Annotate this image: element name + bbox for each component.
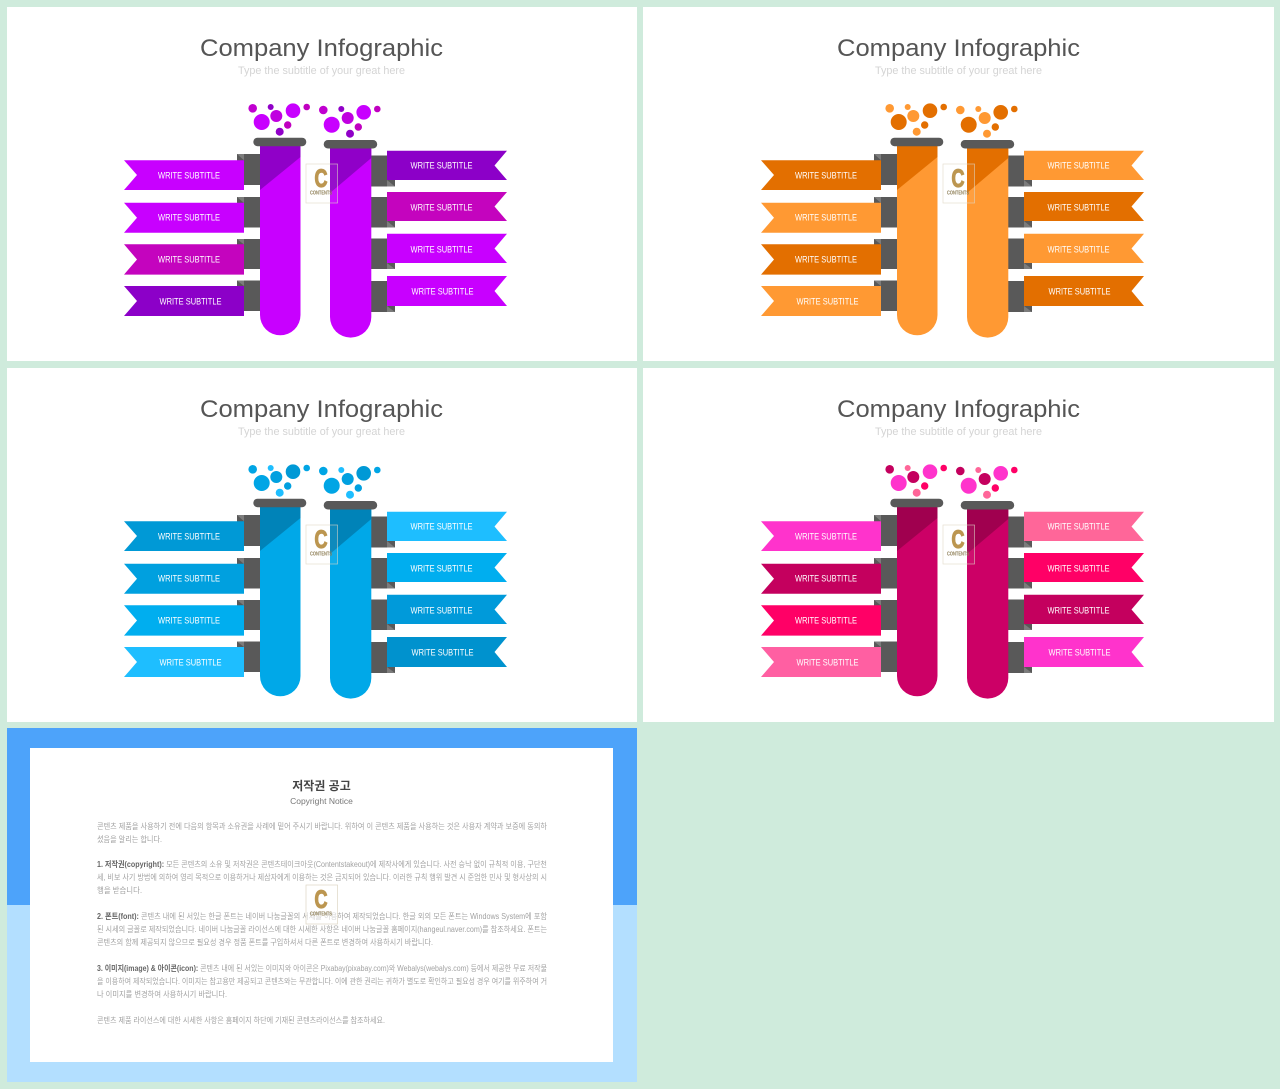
watermark logo <box>306 525 338 564</box>
ribbon: left 3 <box>761 244 881 275</box>
watermark logo <box>943 164 974 203</box>
ribbon: right 2: WRITE SUBTITLE <box>1048 202 1110 212</box>
ribbon: right 1 <box>1024 512 1144 541</box>
section 2: font: 2. 폰트(font): 콘텐츠 내에 된 서있는 한글 폰트는 네이버 나눔글꼴의 서체를 이용하여 제작되었습니다. 한글 외의 모든 폰트는 Windows System에 포함 <box>97 911 548 921</box>
watermark logo: CONTENTS <box>310 190 333 196</box>
gray connector tabs <box>237 515 395 673</box>
subtitle: Type the subtitle of your great here <box>238 65 405 77</box>
ribbon: left 3 <box>124 244 244 275</box>
bubbles: right tube <box>956 466 1018 499</box>
test tube: right <box>324 140 377 338</box>
ribbon: right 4 <box>387 637 507 667</box>
gray connector tabs <box>237 154 395 312</box>
ribbon: left 4: WRITE SUBTITLE <box>160 658 222 668</box>
ribbon: left 3: WRITE SUBTITLE <box>795 254 857 264</box>
ribbon: left 2 <box>124 564 244 594</box>
title: Company Infographic <box>837 35 1080 62</box>
title: Company Infographic <box>837 396 1080 423</box>
ribbon: right 4 <box>1024 637 1144 667</box>
ribbon: left 3: WRITE SUBTITLE <box>158 616 220 626</box>
section 1: copyright: 행을 받습니다. <box>97 885 142 895</box>
watermark logo: CONTENTS <box>947 190 970 196</box>
bubbles: right tube <box>319 466 381 499</box>
ribbon: right 1: WRITE SUBTITLE <box>1048 160 1110 170</box>
gray connector tabs <box>874 154 1032 312</box>
intro text <box>97 821 548 844</box>
section 3: image and icon: 3. 이미지(image) & 아이콘(icon): 콘텐츠 내에 된 서있는 이미지와 아이콘은 Pixabay(pixabay.com)와 Webalys(webalys.com) 등에서 제공한 무료 저작물 <box>97 963 547 973</box>
panel: orange infographic <box>643 7 1274 361</box>
panel: blue infographic <box>7 368 637 722</box>
panel: copyright notice <box>7 728 637 1082</box>
ribbon: left 2 <box>761 203 881 233</box>
ribbon: left 3: WRITE SUBTITLE <box>795 616 857 626</box>
ribbon: left 4 <box>124 647 244 677</box>
copyright subheading: Copyright Notice <box>290 796 353 806</box>
ribbon: left 4 <box>761 647 881 677</box>
test tube: left <box>253 499 306 696</box>
ribbon: right 3: WRITE SUBTITLE <box>410 244 472 254</box>
watermark logo: CONTENTS <box>310 552 333 558</box>
section 1: copyright: 세, 비보 사기 방법에 의하여 영리 목적으로 이용하거나 제삼자에게 이용하는 것은 금지되어 있습니다. 이러한 규칙 행위 발견 시 준엄한 민사 및 형사상의 시 <box>97 872 547 882</box>
section 2: font: 된 시세의 글꼴로 제작되었습니다. 네이버 나눔글꼴 라이선스에 대한 시세한 사항은 네이버 나눔글꼴 홈페이지(hangeul.naver.com)를 참조하세요. 폰트는 <box>97 924 547 934</box>
test tube: right <box>324 501 377 699</box>
ribbon: right 1: WRITE SUBTITLE <box>410 522 472 532</box>
ribbon: right 1 <box>1024 151 1144 180</box>
section 2: font: 콘텐츠의 함께 제공되지 않으므로 필요성 경우 정품 폰트를 구입하셔서 다른 폰트로 변경하여 사용하시기 바랍니다. <box>97 937 433 947</box>
section 1: copyright: 1. 저작권(copyright): 모든 콘텐츠의 소유 및 저작권은 콘텐츠테이크아웃(Contentstakeout)에 제작사에게 있습니다. 사전 승낙 없이 규칙적 이용, 구단천 <box>97 859 547 869</box>
ribbon: left 1: WRITE SUBTITLE <box>795 532 857 542</box>
watermark logo <box>943 525 974 564</box>
ribbon: left 1 <box>761 160 881 190</box>
bubbles: left tube <box>248 103 310 136</box>
ribbon: left 1 <box>761 521 881 551</box>
ribbon: left 2: WRITE SUBTITLE <box>158 212 220 222</box>
subtitle: Type the subtitle of your great here <box>875 426 1042 438</box>
ribbon: left 4: WRITE SUBTITLE <box>160 296 222 306</box>
ribbon: right 2: WRITE SUBTITLE <box>1048 564 1110 574</box>
ribbon: right 3: WRITE SUBTITLE <box>1048 606 1110 616</box>
ribbon: left 3 <box>761 605 881 636</box>
ribbon: right 2 <box>387 192 507 221</box>
watermark logo <box>306 885 338 924</box>
ribbon: left 4: WRITE SUBTITLE <box>796 658 858 668</box>
bubbles: left tube <box>885 103 947 136</box>
subtitle: Type the subtitle of your great here <box>238 426 405 438</box>
ribbon: left 2: WRITE SUBTITLE <box>795 574 857 584</box>
ribbon: right 1: WRITE SUBTITLE <box>410 160 472 170</box>
ribbon: left 2: WRITE SUBTITLE <box>795 212 857 222</box>
watermark logo: C <box>314 886 328 914</box>
bubbles: right tube <box>956 105 1018 138</box>
test tube: left <box>890 138 943 335</box>
watermark logo: C <box>314 165 328 193</box>
ribbon: right 2 <box>1024 553 1144 582</box>
test tube: left <box>890 499 943 696</box>
ribbon: right 1 <box>387 512 507 541</box>
closing text: 콘텐츠 제품 라이선스에 대한 시세한 사항은 홈페이지 하단에 기재된 콘텐츠라이선스를 참조하세요. <box>97 1015 385 1025</box>
ribbon: right 3 <box>387 595 507 624</box>
ribbon: right 1 <box>387 151 507 180</box>
ribbon: left 4 <box>124 286 244 316</box>
subtitle: Type the subtitle of your great here <box>875 65 1042 77</box>
test tube: left <box>253 138 306 335</box>
ribbon: right 3: WRITE SUBTITLE <box>410 606 472 616</box>
ribbon: right 4 <box>387 276 507 306</box>
ribbon: left 1 <box>124 160 244 190</box>
title: Company Infographic <box>200 396 443 423</box>
ribbon: right 4: WRITE SUBTITLE <box>1048 648 1110 658</box>
ribbon: left 2 <box>761 564 881 594</box>
ribbon: left 4 <box>761 286 881 316</box>
bubbles: right tube <box>319 105 381 138</box>
section 3: image and icon: 나 이미지를 변경하여 사용하시기 바랍니다. <box>97 989 227 999</box>
ribbon: right 3: WRITE SUBTITLE <box>1048 244 1110 254</box>
section 3: image and icon: 을 이용하여 제작되었습니다. 이미지는 참고용만 제공되고 콘텐츠와는 무관합니다. 이에 관한 권리는 귀하가 별도로 확인하고 필요성 경우 여기를 위주하여 거 <box>97 976 547 986</box>
intro text: 셨음을 알리는 합니다. <box>97 834 162 844</box>
ribbon: left 2: WRITE SUBTITLE <box>158 574 220 584</box>
ribbon: left 1: WRITE SUBTITLE <box>158 532 220 542</box>
ribbon: right 3 <box>1024 234 1144 263</box>
test tube: right <box>961 501 1014 699</box>
ribbon: right 4 <box>1024 276 1144 306</box>
ribbon: right 2: WRITE SUBTITLE <box>410 564 472 574</box>
watermark logo: CONTENTS <box>947 552 970 558</box>
panel: purple infographic <box>7 7 637 361</box>
ribbon: left 4: WRITE SUBTITLE <box>796 296 858 306</box>
ribbon: left 1 <box>124 521 244 551</box>
ribbon: left 2 <box>124 203 244 233</box>
watermark logo: C <box>952 526 964 554</box>
ribbon: right 3 <box>1024 595 1144 624</box>
ribbon: left 3: WRITE SUBTITLE <box>158 254 220 264</box>
panel: pink infographic <box>643 368 1274 722</box>
watermark logo <box>306 164 338 203</box>
ribbon: left 3 <box>124 605 244 636</box>
gray connector tabs <box>874 515 1032 673</box>
watermark logo: C <box>952 165 964 193</box>
section 2: font <box>97 911 548 947</box>
title: Company Infographic <box>200 35 443 62</box>
watermark logo: C <box>314 526 328 554</box>
bubbles: left tube <box>885 464 947 497</box>
ribbon: right 1: WRITE SUBTITLE <box>1048 522 1110 532</box>
section 1: copyright <box>97 859 547 895</box>
watermark logo: CONTENTS <box>310 912 333 918</box>
ribbon: right 4: WRITE SUBTITLE <box>412 648 474 658</box>
ribbon: right 4: WRITE SUBTITLE <box>1048 286 1110 296</box>
intro text: 콘텐츠 제품을 사용하기 전에 다음의 항목과 소유권을 사례에 밑어 주시기 바랍니다. 위하여 이 콘텐츠 제품을 사용하는 것은 사용자 계약과 보증에 동의하 <box>97 821 548 831</box>
copyright heading: 저작권 공고 <box>292 778 351 793</box>
bubbles: left tube <box>248 464 310 497</box>
test tube: right <box>961 140 1014 338</box>
ribbon: right 2: WRITE SUBTITLE <box>410 202 472 212</box>
ribbon: right 3 <box>387 234 507 263</box>
section 3: image and icon <box>97 963 547 999</box>
ribbon: right 4: WRITE SUBTITLE <box>412 286 474 296</box>
ribbon: left 1: WRITE SUBTITLE <box>158 170 220 180</box>
ribbon: left 1: WRITE SUBTITLE <box>795 170 857 180</box>
ribbon: right 2 <box>1024 192 1144 221</box>
ribbon: right 2 <box>387 553 507 582</box>
